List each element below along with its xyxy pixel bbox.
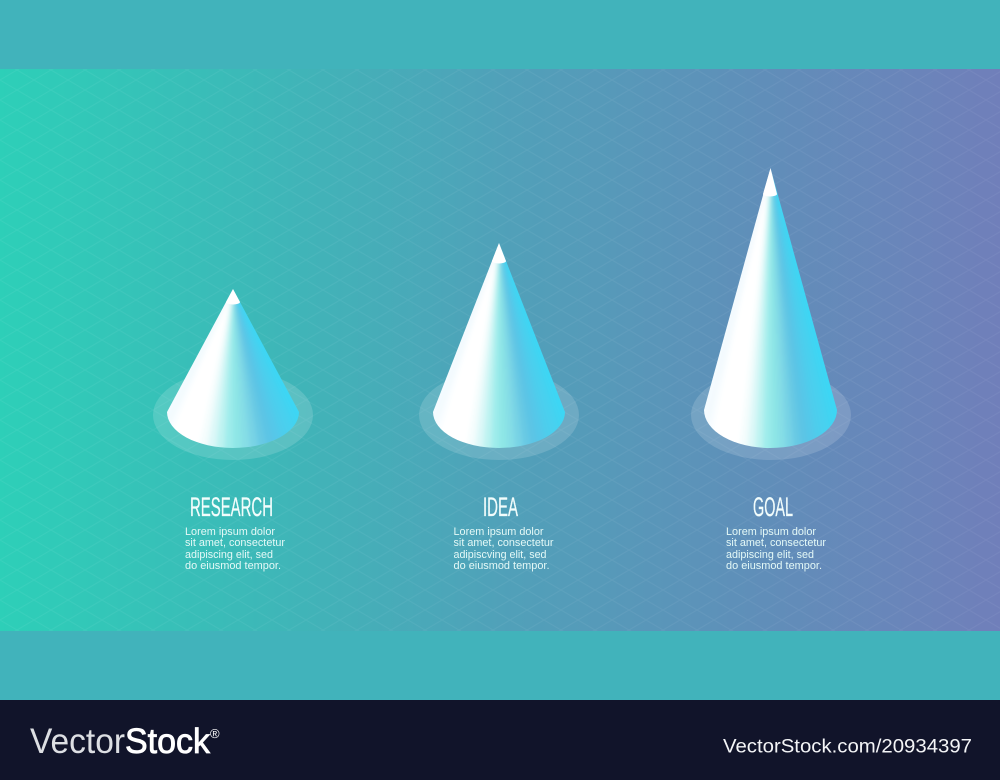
logo: VectorStock: ® <box>210 726 220 741</box>
text block: goal: adipiscing elit, sed <box>726 549 814 561</box>
cone: research <box>153 289 313 460</box>
image id text: VectorStock.com/20934397 <box>723 736 972 758</box>
cone: idea <box>419 243 579 460</box>
column: research <box>185 492 285 572</box>
text block: goal <box>726 526 826 572</box>
text block: research: Lorem ipsum dolor <box>185 526 275 538</box>
logo: VectorStock: Vector <box>30 722 125 761</box>
cone: goal <box>691 168 851 460</box>
logo: VectorStock: Stock <box>125 722 210 761</box>
bottom band <box>0 631 1000 700</box>
watermark bar <box>0 700 1000 780</box>
text block: research: sit amet, consectetur <box>185 537 285 549</box>
text block: research: adipiscing elit, sed <box>185 549 273 561</box>
heading: idea: IDEA <box>483 492 518 522</box>
text block: idea: adipiscving elit, sed <box>454 549 546 561</box>
heading: goal: GOAL <box>753 492 793 522</box>
text block: goal: do eiusmod tempor. <box>726 560 822 572</box>
column: idea <box>454 492 554 572</box>
text block: research <box>185 526 285 572</box>
top band <box>0 0 1000 69</box>
heading: research: RESEARCH <box>190 492 273 522</box>
text block: idea: Lorem ipsum dolor <box>454 526 544 538</box>
column: goal <box>726 492 826 572</box>
text block: research: do eiusmod tempor. <box>185 560 281 572</box>
logo: VectorStock <box>30 722 220 761</box>
text block: goal: sit amet, consectetur <box>726 537 826 549</box>
isometric gradient panel <box>0 69 1000 631</box>
text block: goal: Lorem ipsum dolor <box>726 526 816 538</box>
text block: idea: sit amet, consectetur <box>454 537 554 549</box>
text block: idea: do eiusmod tempor. <box>454 560 550 572</box>
text block: idea <box>454 526 554 572</box>
